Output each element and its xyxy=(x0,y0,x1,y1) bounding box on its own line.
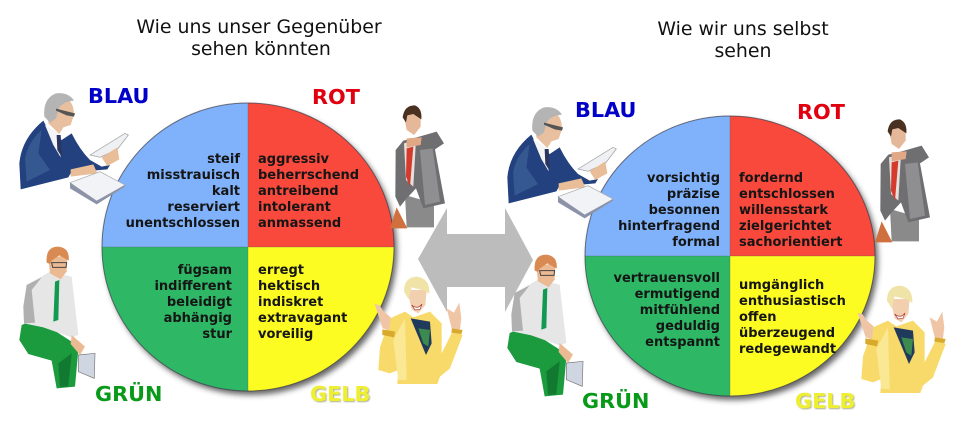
text: green traits, right xyxy=(614,271,720,350)
quadrant: yellow xyxy=(730,256,875,396)
text: red traits, left: beherrschend xyxy=(258,168,359,183)
text: blue traits, left: misstrauisch xyxy=(147,168,240,183)
text: red traits, left: intolerant xyxy=(258,200,331,215)
label: BLAU left: BLAU xyxy=(88,84,149,108)
text: blue traits, left: unentschlossen xyxy=(126,216,240,231)
label: ROT left: ROT xyxy=(312,85,361,109)
text: blue traits, right: formal xyxy=(672,235,720,250)
text: green traits, left: abhängig xyxy=(164,311,232,326)
arrow: double-headed grey arrow xyxy=(418,208,533,312)
text: red traits, right: entschlossen xyxy=(739,187,835,202)
text: green traits, left: fügsam xyxy=(178,263,232,278)
text: yellow traits, right: redegewandt xyxy=(739,342,836,357)
title: right: Wie wir uns selbst xyxy=(657,18,829,40)
text: green traits, right: mitfühlend xyxy=(640,303,720,318)
text: red traits, right: fordernd xyxy=(739,171,803,186)
text: green traits, left: beleidigt xyxy=(167,295,232,310)
icon: woman in yellow, left xyxy=(375,277,463,384)
text: blue traits, right: besonnen xyxy=(649,203,720,218)
icon: man with watch, left xyxy=(390,105,445,228)
quadrant: yellow xyxy=(248,247,394,391)
icon: man seated, left xyxy=(19,247,95,388)
label: BLAU right: BLAU xyxy=(575,98,636,122)
text: yellow traits, right: umgänglich xyxy=(739,278,824,293)
text: yellow traits, left: voreilig xyxy=(258,327,313,342)
label: GRÜN right: GRÜN xyxy=(582,388,649,413)
panel: right wheel xyxy=(585,116,878,400)
text: blue traits, right: präzise xyxy=(667,187,720,202)
quadrant: blue xyxy=(102,103,248,247)
text: red traits, right: zielgerichtet xyxy=(739,219,832,234)
text: red traits, left: aggressiv xyxy=(258,152,330,167)
text: yellow traits, right: überzeugend xyxy=(739,326,835,341)
text: red traits, right xyxy=(739,171,842,250)
text: yellow traits, right: offen xyxy=(739,310,777,325)
icon: man reading, right xyxy=(507,107,616,218)
text: yellow traits, right: enthusiastisch xyxy=(739,294,846,309)
text: green traits, left xyxy=(154,263,233,342)
panel: left wheel xyxy=(102,103,397,395)
text: yellow traits, left xyxy=(258,263,347,342)
text: green traits, right: ermutigend xyxy=(635,287,720,302)
text: yellow traits, left: indiskret xyxy=(258,295,323,310)
text: green traits, right: vertrauensvoll xyxy=(614,271,720,286)
text: blue traits, left: kalt xyxy=(212,184,240,199)
text: red traits, left: antreibend xyxy=(258,184,339,199)
text: yellow traits, left: extravagant xyxy=(258,311,347,326)
text: yellow traits, right xyxy=(739,278,846,357)
text: blue traits, right: vorsichtig xyxy=(647,171,720,186)
text: red traits, right: sachorientiert xyxy=(739,235,842,250)
text: red traits, left: anmassend xyxy=(258,216,341,231)
quadrant: green xyxy=(585,256,730,396)
icon: man seated, right xyxy=(507,255,583,396)
icon: woman in yellow, right xyxy=(858,286,946,393)
quadrant: red xyxy=(730,116,875,256)
icon: man with watch, right xyxy=(875,119,930,242)
text: blue traits, left: reserviert xyxy=(167,200,240,215)
label: GRÜN left: GRÜN xyxy=(95,381,162,406)
label: ROT right: ROT xyxy=(797,100,846,124)
text: green traits, left: indifferent xyxy=(154,279,232,294)
title: right xyxy=(657,18,829,62)
quadrant: blue xyxy=(585,116,730,256)
text: yellow traits, left: erregt xyxy=(258,263,304,278)
title: right: sehen xyxy=(714,40,772,62)
quadrant: green xyxy=(102,247,248,391)
icon: man reading, left xyxy=(19,93,128,204)
text: blue traits, left xyxy=(126,152,240,231)
text: blue traits, right xyxy=(618,171,720,250)
label: GELB left: GELB xyxy=(310,382,370,406)
title: left: sehen könnten xyxy=(191,38,331,60)
text: red traits, right: willensstark xyxy=(739,203,828,218)
text: red traits, left xyxy=(258,152,359,231)
title: left xyxy=(136,16,382,60)
title: left: Wie uns unser Gegenüber xyxy=(136,16,382,38)
text: blue traits, right: hinterfragend xyxy=(618,219,720,234)
label: GELB right: GELB xyxy=(795,389,855,413)
text: green traits, left: stur xyxy=(202,327,233,342)
text: yellow traits, left: hektisch xyxy=(258,279,320,294)
quadrant: red xyxy=(248,103,394,247)
text: green traits, right: geduldig xyxy=(656,319,720,334)
text: blue traits, left: steif xyxy=(207,152,240,167)
text: green traits, right: entspannt xyxy=(645,335,720,350)
